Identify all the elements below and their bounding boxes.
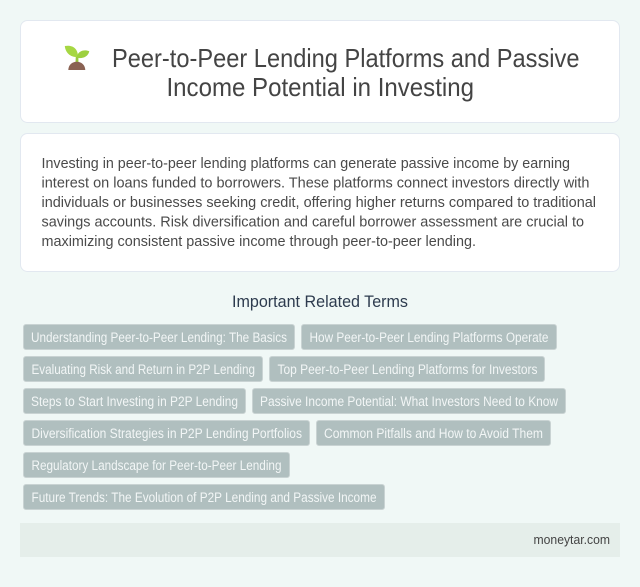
tag: common pitfalls: Common Pitfalls and How to Avoid Them	[324, 426, 543, 441]
tag: future trends	[24, 484, 384, 510]
text block: description: individuals or businesses seeking credit, offering higher returns compared to traditional	[42, 194, 596, 211]
tag: steps to start	[24, 388, 246, 414]
tag: diversification strategies	[24, 420, 310, 446]
heading: related terms: Important Related Terms	[232, 293, 408, 311]
icon: sprout	[65, 46, 89, 70]
tag: common pitfalls	[316, 420, 550, 446]
tag: how platforms operate: How Peer-to-Peer Lending Platforms Operate	[310, 330, 548, 345]
footer bar	[20, 523, 620, 557]
tag: risk and return	[24, 356, 262, 382]
text block: description: maximizing consistent passive income through peer-to-peer lending.	[42, 233, 476, 250]
tag: passive income potential: Passive Income Potential: What Investors Need to Know	[260, 394, 558, 409]
tag: top platforms	[270, 356, 544, 382]
text block: description: savings accounts. Risk diversification and careful borrower assessment are crucial to	[42, 214, 584, 230]
panel: related term tags	[24, 324, 566, 510]
panel: title card	[20, 20, 620, 122]
tag: how platforms operate	[302, 324, 556, 350]
title	[112, 45, 580, 102]
text block: description	[42, 155, 596, 250]
tag: steps to start: Steps to Start Investing in P2P Lending	[31, 394, 238, 409]
tag: passive income potential	[252, 388, 566, 414]
panel: description card	[20, 134, 620, 272]
text block: description: Investing in peer-to-peer lending platforms can generate passive income by earning	[42, 155, 570, 172]
title: Income Potential in Investing	[166, 74, 474, 102]
tag: regulatory landscape: Regulatory Landscape for Peer-to-Peer Lending	[32, 458, 282, 473]
tag: top platforms: Top Peer-to-Peer Lending Platforms for Investors	[278, 362, 538, 377]
tag: understanding basics: Understanding Peer-to-Peer Lending: The Basics	[31, 330, 287, 345]
tag: understanding basics	[24, 324, 294, 350]
text block: description: interest on loans funded to borrowers. These platforms connect investors directly with	[42, 174, 590, 192]
tag: risk and return: Evaluating Risk and Return in P2P Lending	[32, 362, 255, 377]
title: Peer-to-Peer Lending Platforms and Passive	[112, 45, 580, 73]
tag: diversification strategies: Diversification Strategies in P2P Lending Portfolios	[32, 426, 302, 441]
tag: future trends: Future Trends: The Evolution of P2P Lending and Passive Income	[32, 490, 376, 505]
tag: regulatory landscape	[24, 452, 290, 478]
footer text: site name: moneytar.com	[534, 532, 610, 547]
